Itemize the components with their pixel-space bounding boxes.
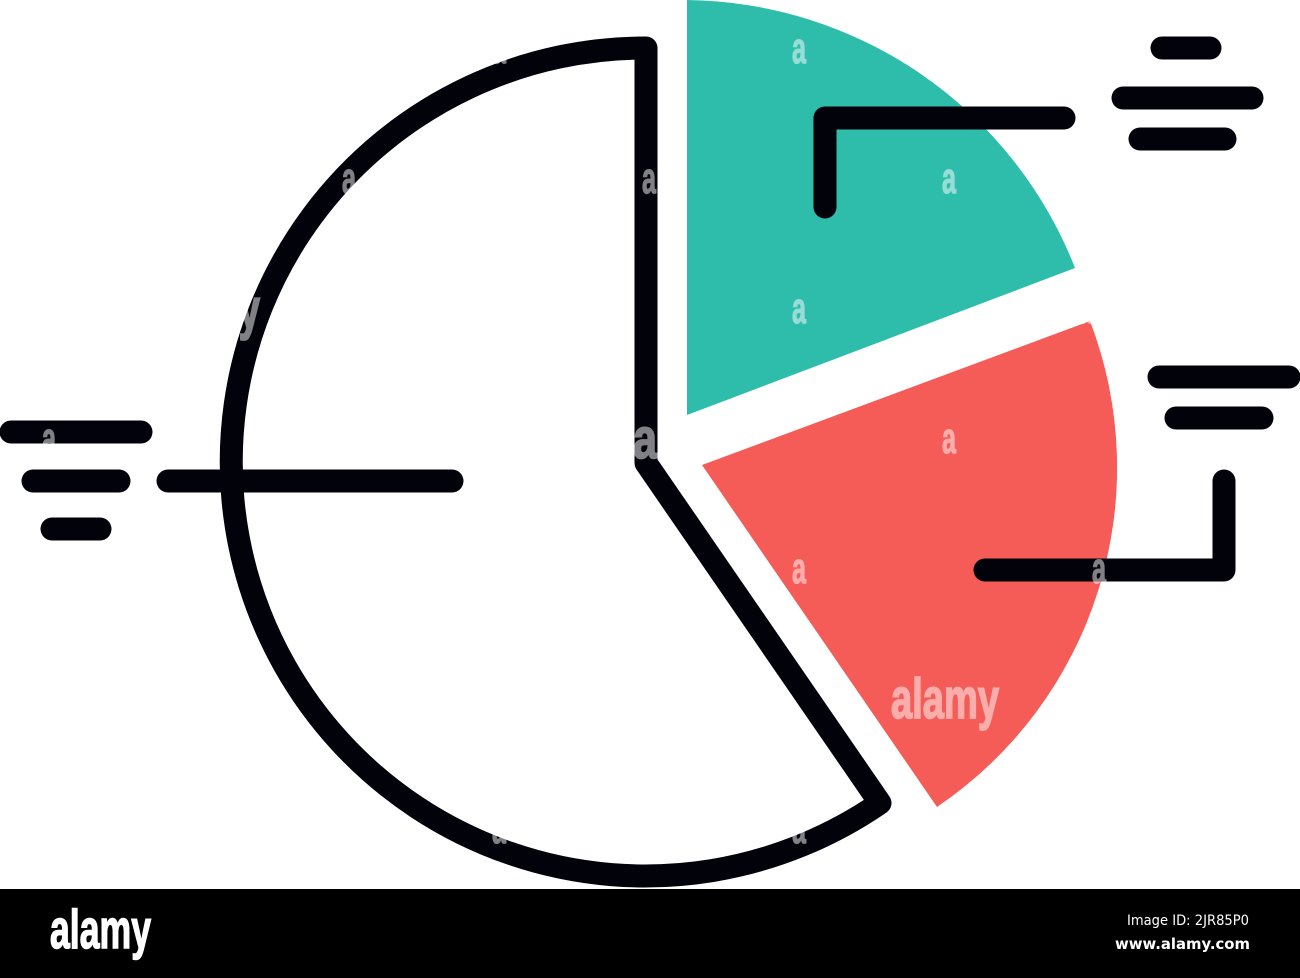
footer bar — [0, 889, 1300, 978]
watermark pattern: a — [642, 154, 656, 203]
watermark pattern: a — [792, 804, 806, 853]
watermark pattern: al — [633, 407, 669, 471]
watermark pattern: a — [1092, 544, 1106, 593]
teal callout line — [825, 118, 1064, 207]
white pie outline — [231, 48, 880, 876]
teal pie slice — [687, 0, 1075, 415]
watermark pattern: a — [942, 414, 956, 463]
watermark pattern: a — [792, 544, 806, 593]
watermark pattern: a — [792, 284, 806, 333]
watermark pattern: alamy — [891, 667, 999, 731]
watermark pattern: a — [792, 24, 806, 73]
watermark pattern: a — [492, 804, 506, 853]
watermark pattern: a — [492, 24, 506, 73]
top right legend lines — [1123, 48, 1252, 139]
bottom right legend lines — [1159, 377, 1289, 418]
footer logo: alamy — [50, 898, 151, 960]
watermark pattern — [42, 24, 1106, 853]
left callout line — [168, 470, 452, 492]
left legend lines — [11, 432, 141, 529]
red callout line — [985, 481, 1224, 570]
image id: Image ID: 2JR85P0 — [1127, 913, 1249, 929]
watermark pattern: a — [42, 414, 56, 463]
red pie slice — [702, 321, 1117, 807]
watermark pattern: a — [942, 154, 956, 203]
watermark pattern: a — [1078, 284, 1092, 333]
watermark pattern: a — [342, 154, 356, 203]
watermark pattern: alamy — [151, 277, 260, 341]
url: www.alamy.com — [1115, 935, 1250, 953]
